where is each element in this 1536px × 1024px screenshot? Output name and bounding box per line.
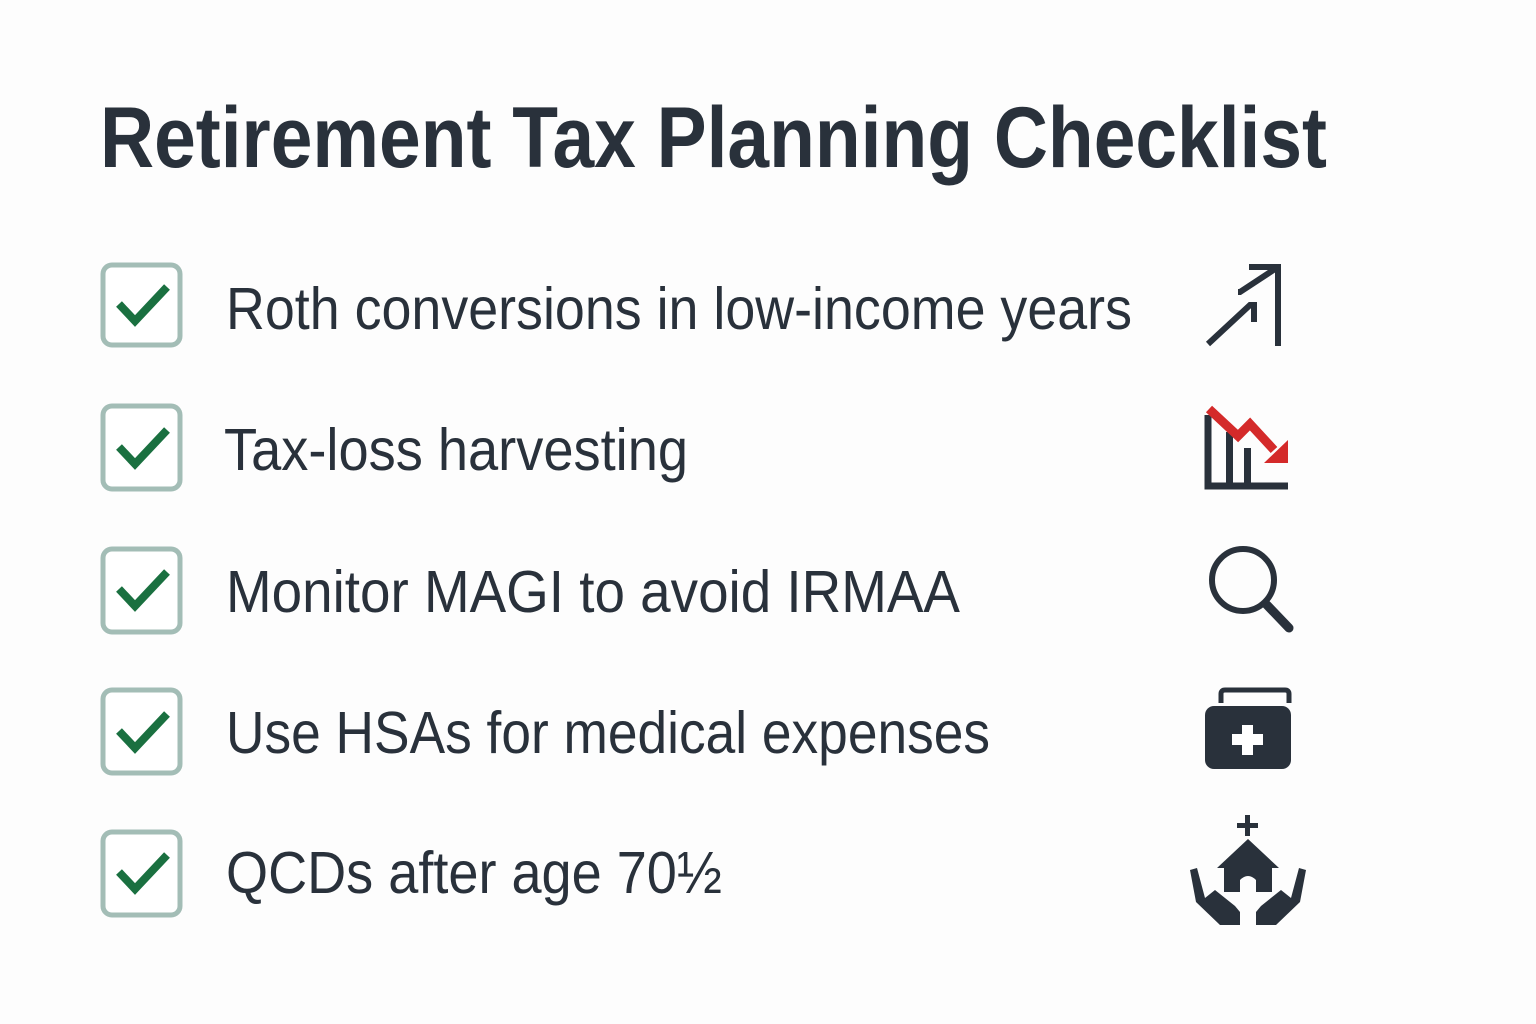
checkbox 1 <box>103 265 180 345</box>
icon: falling chart <box>1208 409 1288 486</box>
checkbox 2 <box>103 406 180 489</box>
title: Retirement Tax Planning Checklist <box>100 90 1327 186</box>
row 2: Tax-loss harvesting <box>103 406 1288 489</box>
text 1: Roth conversions in low-income years <box>226 276 1132 342</box>
checkbox 4 <box>103 690 180 773</box>
row 3: Monitor MAGI <box>103 549 1289 632</box>
text 2: Tax-loss harvesting <box>224 417 688 483</box>
text 5: QCDs after age 70½ <box>226 840 722 906</box>
icon: medical kit <box>1205 690 1291 769</box>
row 5: QCDs <box>103 815 1306 925</box>
icon: charity hands house <box>1190 815 1306 925</box>
checkbox 5 <box>103 832 180 915</box>
icon: up arrows <box>1208 267 1278 346</box>
text 3: Monitor MAGI to avoid IRMAA <box>226 559 961 625</box>
row 4: HSAs <box>103 690 1291 773</box>
icon: magnifier <box>1212 549 1289 628</box>
text 4: Use HSAs for medical expenses <box>226 700 990 766</box>
row 1: Roth conversions <box>103 265 1278 346</box>
checkbox 3 <box>103 549 180 632</box>
